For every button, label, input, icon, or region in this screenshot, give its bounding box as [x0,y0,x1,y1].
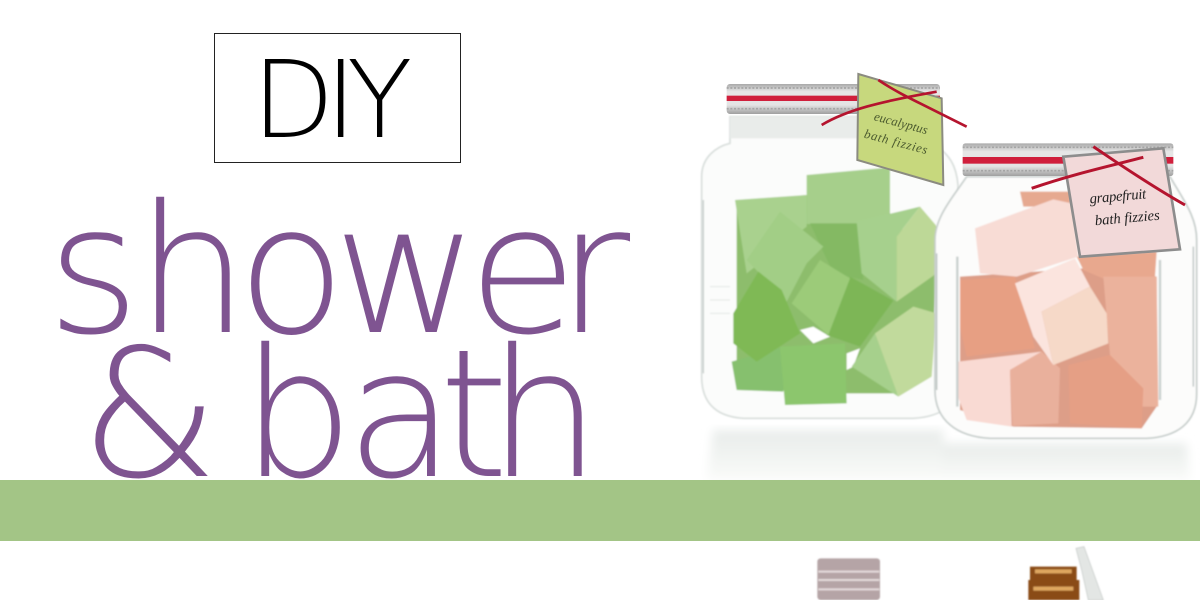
badge: DIY: DIY [252,39,412,163]
title: shower & bath: shower [47,167,631,374]
tag: eucalyptus bath fizzies: bath fizzies [863,127,929,157]
jar lid: eucalyptus [727,84,940,114]
tag: eucalyptus bath fizzies: eucalyptus [873,109,929,137]
reflection on table [707,430,1190,480]
tag: grapefruit bath fizzies [1063,148,1180,257]
photo: jars of bath fizzies [702,74,1197,480]
jar: eucalyptus green [702,117,958,418]
tag: eucalyptus bath fizzies [857,74,943,185]
photo: amber bottle and dropper [1028,547,1103,600]
green band [0,480,1200,541]
title: shower & bath [47,167,631,518]
badge: DIY [214,34,460,163]
tag: grapefruit bath fizzies: bath fizzies [1094,208,1161,229]
ribbon: green jar [822,80,967,127]
jar: grapefruit pink [935,177,1197,438]
ribbon: pink jar [1032,147,1185,205]
glass ridges [703,193,957,373]
jar lid: grapefruit [963,143,1173,176]
green cubes [737,195,937,393]
title: shower & bath: & bath [80,311,601,518]
photo: bottle cap [817,558,880,600]
pink cubes [960,267,1157,428]
tag: grapefruit bath fizzies: grapefruit [1089,186,1148,207]
